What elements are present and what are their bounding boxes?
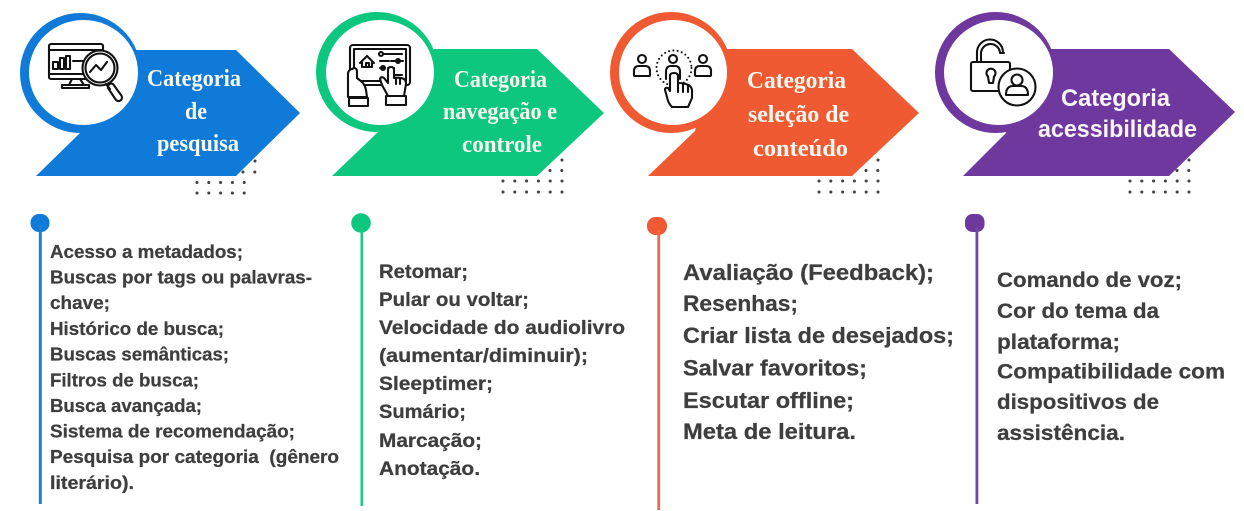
heading: categoria seleção de conteúdo	[747, 68, 849, 162]
timeline marker: purple	[965, 214, 984, 504]
heading: categoria seleção de conteúdo: Categoria	[747, 68, 846, 94]
heading: categoria acessibilidade: Categoria	[1061, 85, 1171, 112]
icon ring: blue	[20, 13, 141, 133]
list: pesquisa: Sistema de recomendação;	[50, 422, 295, 442]
list: seleção de conteúdo: Avaliação (Feedback);	[683, 260, 934, 285]
list: seleção de conteúdo: Salvar favoritos;	[683, 356, 867, 380]
list: pesquisa: Buscas semânticas;	[50, 344, 229, 364]
list: navegação e controle: Sumário;	[379, 401, 466, 423]
panel: categoria navegação e controle	[316, 12, 604, 192]
timeline marker: orange	[647, 217, 667, 510]
dot pattern	[1130, 160, 1190, 192]
list: seleção de conteúdo: Meta de leitura.	[683, 419, 856, 444]
timeline marker: green	[351, 213, 371, 506]
list: acessibilidade: Compatibilidade com	[997, 360, 1225, 384]
list: acessibilidade: Cor do tema da	[997, 300, 1159, 323]
arrow: purple	[963, 49, 1235, 176]
list: navegação e controle: Sleeptimer;	[379, 373, 493, 395]
list: acessibilidade: plataforma;	[997, 331, 1120, 354]
heading: categoria navegação e controle: Categoria	[454, 67, 547, 93]
list: pesquisa: Acesso a metadados;	[50, 242, 243, 262]
panel: categoria seleção de conteúdo	[610, 12, 919, 192]
list: acessibilidade	[997, 269, 1225, 445]
list: acessibilidade: Comando de voz;	[997, 269, 1182, 292]
heading: categoria seleção de conteúdo: seleção de	[748, 102, 849, 128]
list: pesquisa: Busca avançada;	[50, 396, 202, 416]
list: pesquisa	[50, 242, 339, 493]
list: pesquisa: Histórico de busca;	[50, 319, 224, 339]
icon ring: orange	[610, 12, 732, 133]
list: pesquisa: literário).	[50, 473, 134, 493]
list: pesquisa: Buscas por tags ou palavras-	[50, 268, 312, 288]
icon: monitor with magnifier	[49, 44, 122, 101]
heading: categoria navegação e controle: controle	[462, 132, 542, 158]
list: seleção de conteúdo: Resenhas;	[683, 291, 798, 316]
panel: categoria de pesquisa	[20, 13, 300, 193]
list: acessibilidade: assistência.	[997, 422, 1125, 445]
heading: categoria navegação e controle: navegação e	[443, 99, 557, 125]
list: seleção de conteúdo: Escutar offline;	[683, 388, 854, 413]
heading: categoria acessibilidade: acessibilidade	[1038, 116, 1197, 143]
list: acessibilidade: dispositivos de	[997, 391, 1159, 414]
icon ring: purple	[935, 12, 1056, 133]
heading: categoria acessibilidade	[1038, 85, 1197, 143]
list: pesquisa: Pesquisa por categoria (gênero	[50, 447, 339, 467]
dot pattern	[197, 161, 256, 193]
heading: categoria de pesquisa	[147, 66, 241, 157]
list: navegação e controle: Anotação.	[379, 458, 480, 480]
panel: categoria acessibilidade	[935, 12, 1235, 192]
arrow: green	[332, 49, 604, 176]
icon: people and pointing hand	[634, 50, 711, 107]
heading: categoria de pesquisa: de	[185, 99, 207, 125]
list: seleção de conteúdo	[683, 260, 954, 444]
list: navegação e controle: Pular ou voltar;	[379, 289, 529, 311]
arrow: blue	[36, 50, 300, 176]
icon: open lock with user	[971, 39, 1036, 106]
arrow: orange	[648, 49, 919, 176]
icon: hands on tablet	[348, 45, 410, 106]
dot pattern	[503, 160, 563, 192]
icon ring: green	[316, 12, 438, 132]
list: seleção de conteúdo: Criar lista de desejados;	[683, 323, 954, 348]
list: navegação e controle: (aumentar/diminuir);	[379, 345, 588, 367]
list: navegação e controle: Velocidade do audiolivro	[379, 317, 625, 339]
list: navegação e controle	[379, 261, 625, 480]
list: navegação e controle: Retomar;	[379, 261, 468, 283]
heading: categoria de pesquisa: Categoria	[147, 66, 241, 92]
heading: categoria de pesquisa: pesquisa	[157, 131, 239, 157]
heading: categoria seleção de conteúdo: conteúdo	[753, 136, 848, 162]
heading: categoria navegação e controle	[443, 67, 557, 158]
timeline marker: blue	[30, 214, 50, 504]
list: navegação e controle: Marcação;	[379, 430, 482, 452]
dot pattern	[819, 160, 879, 192]
list: pesquisa: chave;	[50, 293, 110, 313]
list: pesquisa: Filtros de busca;	[50, 370, 199, 390]
